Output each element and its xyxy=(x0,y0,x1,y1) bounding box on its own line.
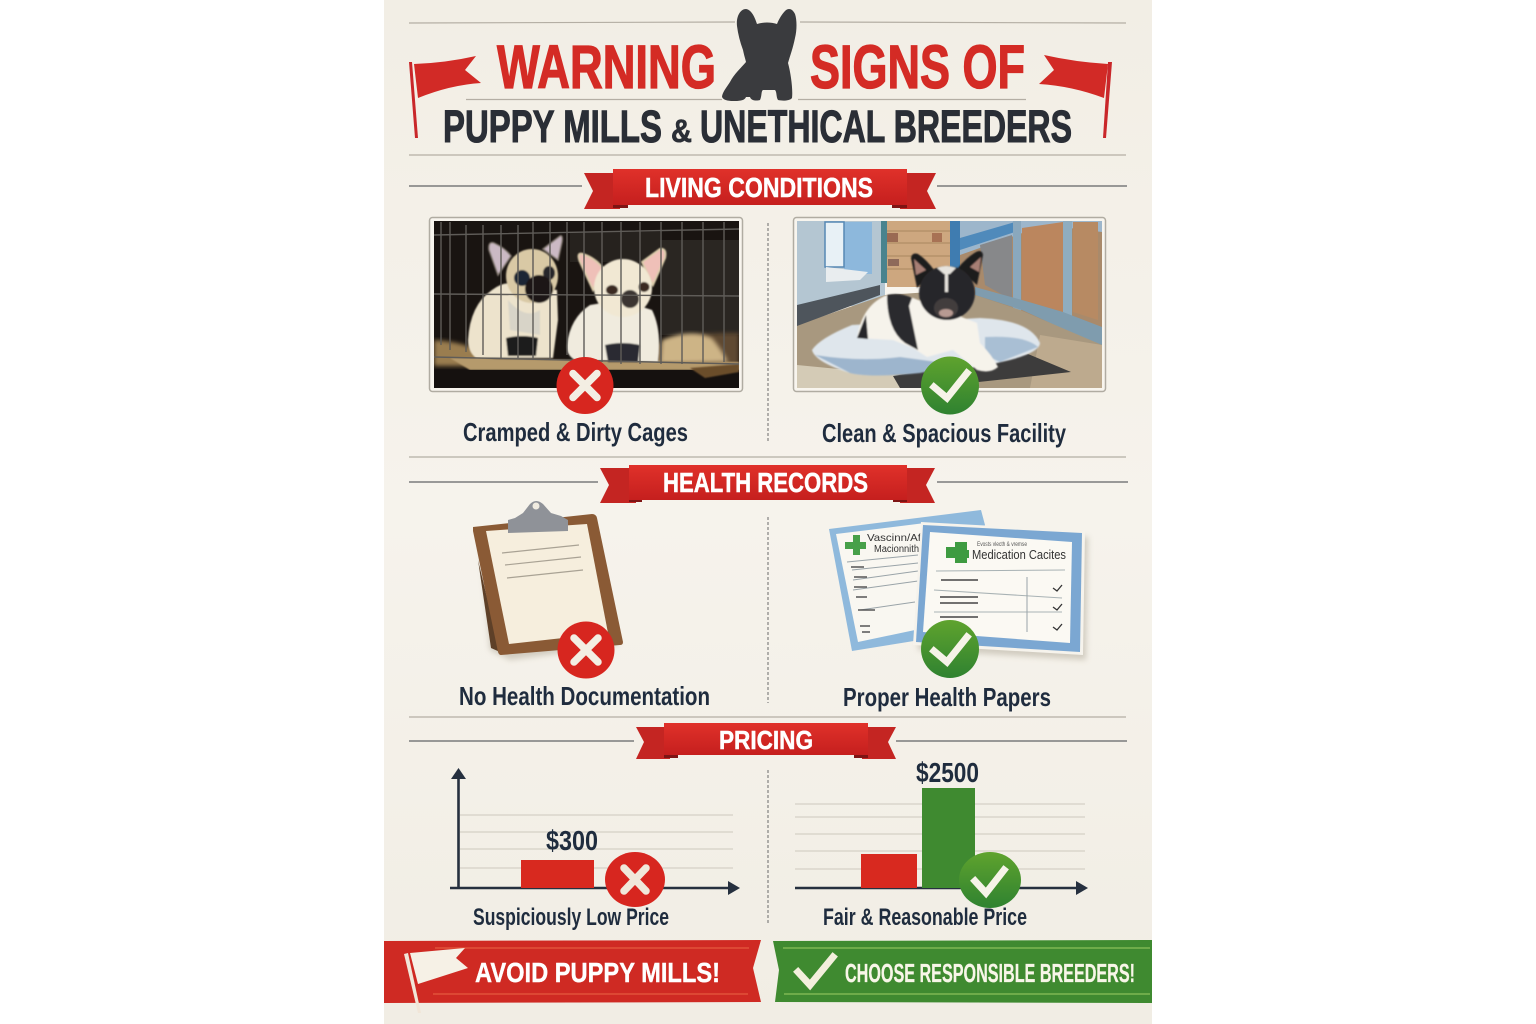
back certificate: Macionnith xyxy=(874,544,919,555)
clipboard clip xyxy=(508,501,568,533)
caption: proper health papers: Proper Health Papers xyxy=(843,682,1051,712)
callout text: CHOOSE RESPONSIBLE BREEDERS! xyxy=(845,958,1135,988)
icon: white flag xyxy=(404,948,468,1013)
section banner: pricing xyxy=(409,723,1127,759)
resting dog xyxy=(857,295,998,371)
banner heading: LIVING CONDITIONS xyxy=(645,172,873,203)
icon: empty clipboard xyxy=(473,501,623,660)
front certificate: Medication Cacites xyxy=(972,548,1066,562)
title line: unethical breeders: UNETHICAL BREEDERS xyxy=(700,101,1072,152)
section banner: health records xyxy=(409,465,1128,503)
price label: 2500: $2500 xyxy=(916,757,979,788)
price label: 300: $300 xyxy=(546,825,598,856)
dog two xyxy=(567,300,659,362)
back certificate: Vascinn/Af xyxy=(867,532,921,544)
cage bars xyxy=(434,222,739,364)
icon: french bulldog silhouette xyxy=(722,9,796,101)
fair price bar, green xyxy=(922,788,975,888)
front certificate xyxy=(913,522,1085,655)
caption: suspiciously low price: Suspiciously Low Price xyxy=(473,904,669,931)
back certificate xyxy=(829,510,985,651)
front certificate: Evosts vlecth & vremse xyxy=(977,542,1028,548)
panel: cramped cage photo xyxy=(430,218,742,392)
title line: warning: WARNING xyxy=(497,33,716,101)
icon: red x badge, chart xyxy=(605,852,665,907)
icon: right red pennant xyxy=(1039,55,1112,138)
icon: green check badge, chart xyxy=(959,852,1021,908)
chart: fair price xyxy=(795,757,1088,895)
banner heading: PRICING xyxy=(719,725,813,755)
callout text: AVOID PUPPY MILLS! xyxy=(475,957,720,988)
caption: no health documentation: No Health Documentation xyxy=(459,681,710,711)
caption: fair and reasonable price: Fair & Reasonable Price xyxy=(823,904,1027,931)
title line: puppy mills: PUPPY MILLS xyxy=(443,101,662,152)
callout: choose responsible breeders xyxy=(773,940,1152,1003)
icon: red x badge, photo xyxy=(556,357,614,414)
dog one xyxy=(468,283,558,358)
column dividers xyxy=(767,223,769,925)
section banner: living conditions xyxy=(409,169,1127,209)
background paper panel xyxy=(384,0,1152,1024)
banner heading: HEALTH RECORDS xyxy=(663,467,868,498)
title ampersand: & xyxy=(671,113,692,149)
caption: cramped and dirty cages: Cramped & Dirty Cages xyxy=(463,417,688,447)
title xyxy=(443,33,1072,152)
header rules xyxy=(409,22,1126,717)
comparison bar, red xyxy=(861,854,917,888)
icon: health papers xyxy=(829,510,1088,660)
icon: white check xyxy=(798,957,833,985)
callout: avoid puppy mills xyxy=(384,940,761,1013)
chart: suspiciously low price xyxy=(450,768,740,895)
icon: left red pennant xyxy=(409,56,481,138)
low price bar xyxy=(521,860,594,888)
icon: green check badge, papers xyxy=(921,620,979,678)
icon: red x badge, clipboard xyxy=(558,622,614,678)
title line: signs of: SIGNS OF xyxy=(810,33,1025,101)
cushion xyxy=(812,318,1040,375)
caption: clean and spacious facility: Clean & Spacious Facility xyxy=(822,418,1066,448)
panel: clean facility photo xyxy=(794,218,1106,392)
icon: green check badge, photo xyxy=(921,356,979,414)
